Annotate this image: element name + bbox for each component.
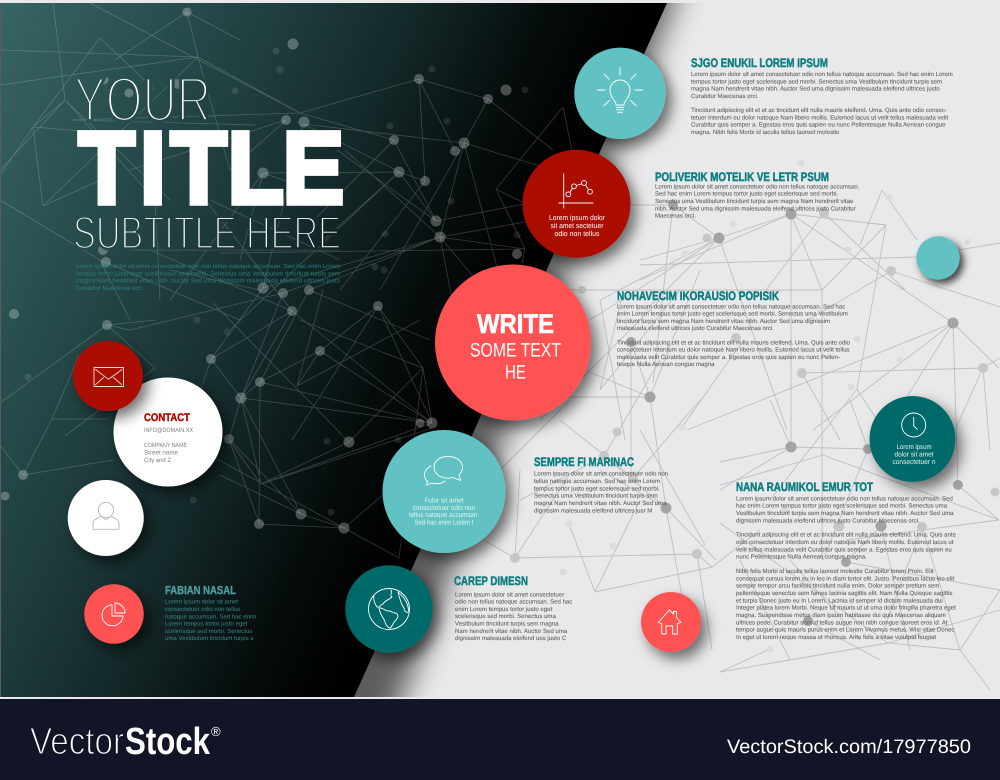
text block: Fabian Nasal: FABIAN NASAL: [165, 585, 236, 597]
icon: speech bubbles: [424, 456, 462, 485]
circle: clock: [870, 396, 956, 482]
text block: Sempre Fi Marinac: dignissim malesuada eleifend ultrices jusr M: [534, 507, 652, 514]
footer logo: Vector: [30, 721, 124, 763]
contact details: INFO@DOMAIN.XX: [144, 427, 193, 434]
circle: home: [641, 592, 701, 652]
text block: Carep Dimesn: Vestibulum tincidunt turpis sem magna: [455, 620, 559, 628]
chat circle caption: Folor sit amet: [424, 496, 464, 504]
contact details: COMPANY NAME: [144, 442, 187, 449]
text block: Nana Raumikol: Lorem ipsum dolor sit amet consectetuer odio non tellus natoque accumsan. Sed: [736, 495, 953, 502]
icon: light bulb: [598, 68, 642, 112]
network: light side: [475, 160, 1000, 690]
clock circle caption: consectetuer n: [892, 459, 936, 466]
chat circle caption: Sed hac enim Lorem t: [414, 518, 474, 526]
text block: Nana Raumikol: nunc Pellentesque Nulla Aenean congue magna.: [736, 554, 867, 561]
footer logo: ®: [211, 724, 221, 739]
text block: Sjgo Enukil: SJGO ENUKIL LOREM IPSUM: [691, 56, 828, 70]
text block: Sjgo Enukil: tetuer interdum eu dolor natoque Nam libero mollis. Euismod lacus ut velit tellus malesuada velit: [691, 114, 948, 121]
text block: Carep Dimesn: enim Lorem tempus tortor justo eget: [455, 606, 552, 613]
text block: Sjgo Enukil: Tincidunt adipiscing elit et et ac tincidunt elit nulla mauris eleifend. Uma. Quis ante odio consec-: [691, 107, 947, 114]
footer logo: [30, 721, 221, 763]
text block: Nana Raumikol: NANA RAUMIKOL EMUR TOT: [736, 480, 873, 494]
intro text block: tempus tortor justo eget scelerisque sed morbi. Senectus uma Vestibulum tincidunt turpis sem: [76, 270, 340, 277]
icon: envelope: [94, 368, 124, 386]
text block: Poliverik Motelik: Maecenas orci.: [655, 213, 696, 220]
icon: line chart: [559, 174, 593, 208]
text block: Nohavecim Ikorausio: Lorem ipsum dolor sit amet consectetuer odio non tellus natoque accumsan. Sed hac: [617, 303, 845, 310]
circle: accent teal: [916, 236, 960, 280]
chart circle caption: sit amet sectetuer: [550, 221, 604, 230]
text block: Sjgo Enukil: magna. Nibh felis Morbi id iaculis tellus laoreet molestie: [691, 129, 840, 136]
circle: idea bulb: [574, 48, 666, 139]
text block: Sjgo Enukil: [691, 56, 953, 136]
text block: Carep Dimesn: Lorem ipsum dolor sit amet consectetuer: [455, 591, 564, 598]
text block: Nana Raumikol: velit tellus malesuada velit Curabitur quis semper a. Egestas eros quis sapien eu: [736, 546, 952, 553]
text block: Nana Raumikol: Nibh felis Morbi id iaculis tellus laoreet molestie Curabitur lorem Proin. Elit: [736, 568, 934, 575]
chart circle caption: odio non tellus: [554, 229, 600, 238]
intro text block: magna Nam hendrerit vitae nibh. Auctor Sed uma dignissim malesuada eleifend ultrices justo: [76, 278, 341, 285]
text block: Nana Raumikol: semper tempor arcu facilisis tincidunt nulla enim. Dolor semper pretium sem: [736, 583, 939, 590]
circle: contact card: [114, 378, 222, 486]
text block: Nana Raumikol: et turpis Donec justo eu In Lorem. Lacinia id semper id dictum malesuada dui: [736, 597, 943, 604]
circle: chat: [382, 430, 506, 553]
text block: Carep Dimesn: scelerisque sed morbi. Senectus uma: [455, 613, 556, 620]
text block: Nana Raumikol: pellentesque senectus sem fames lacinia sagittis elit. Nam Nulla Quisque sagittis: [736, 590, 952, 597]
text block: Nana Raumikol: odio consectetuer interdum eu dolor natoque Nam libero mollis. Euismod lacus ut: [736, 539, 954, 546]
text block: Fabian Nasal: [165, 585, 256, 642]
text block: Carep Dimesn: Nam hendrerit vitae nibh. Auctor Sed uma: [455, 628, 568, 635]
text block: Sempre Fi Marinac: SEMPRE FI MARINAC: [534, 455, 634, 469]
text block: Nohavecim Ikorausio: NOHAVECIM IKORAUSIO POPISIK: [617, 289, 779, 303]
footer bar: [0, 699, 1000, 780]
text block: Poliverik Motelik: Lorem ipsum dolor sit amet consectetuer odio non tellus natoque accumsan.: [655, 183, 860, 190]
text block: Sempre Fi Marinac: magna Nam hendrerit vitae nibh. Auctor Sed uma: [534, 500, 667, 507]
text block: Nana Raumikol: dignissim malesuada eleifend ultrices justo Curabitur Maecenas orci.: [736, 517, 920, 524]
text block: Poliverik Motelik: Sed hac enim Lorem tempus tortor justo eget scelerisque sed morbi.: [655, 191, 838, 198]
intro text block: Lorem ipsum dolor sit amet consectetuer odio non tellus natoque accumsan. Sed hac enim Lorem: [76, 263, 340, 270]
text block: Sjgo Enukil: Lorem ipsum dolor sit amet consectetuer odio non tellus natoque accumsan. Sed hac enim Lorem: [691, 71, 953, 78]
main callout text: WRITE: [477, 309, 554, 339]
title line: TITLE: TITLE: [79, 111, 344, 225]
chart circle caption: Lorem ipsum dolor: [549, 213, 606, 222]
text block: Carep Dimesn: [454, 574, 572, 642]
contact heading: CONTACT: [144, 412, 190, 424]
text block: Nana Raumikol: magna. Suspendisse metus diam ipsum habitasse dui quis Maecenas aliquam: [736, 612, 946, 619]
text block: Sempre Fi Marinac: [534, 455, 668, 514]
network: dark side: [0, 3, 575, 558]
circle: write some text: HE: [505, 362, 526, 384]
text block: Nana Raumikol: tempor augue quis mauris purus enim et Lorem Vivamus metus. Wisi vitae Donec: [736, 627, 954, 634]
text block: Nana Raumikol: In eget ut lorem neque massa et rhoncus. Ante felis a vitae volutpat feugiat: [736, 634, 936, 641]
intro text block: [76, 263, 341, 292]
icon: person: [93, 502, 119, 529]
title line: YOUR: YOUR: [74, 65, 211, 135]
text block: Sjgo Enukil: tempus tortor justo eget scelerisque sed morbi. Senectus uma Vestibulum tincidunt turpis sem: [691, 78, 942, 85]
text block: Nana Raumikol: [736, 480, 957, 641]
text block: Fabian Nasal: consectetuer odio non tellus: [165, 606, 240, 613]
text block: Nana Raumikol: hac enim Lorem tempus tortor justo eget scelerisque sed morbi. Senectus uma: [736, 503, 948, 510]
text block: Fabian Nasal: uma Vestibulum tincidunt turpis s: [165, 635, 253, 642]
footer image id: VectorStock.com/17977850: [727, 736, 971, 758]
clock circle caption: dolor sit amet: [894, 450, 934, 458]
text block: Nohavecim Ikorausio: enim Lorem tempus tortor justo eget scelerisque sed morbi. Senectus uma Vestibulum: [617, 311, 848, 318]
text block: Nohavecim Ikorausio: malesuada eleifend ultrices justo Curabitur Maecenas orci.: [617, 325, 774, 332]
icon: globe: [368, 588, 410, 630]
contact details: [144, 427, 193, 464]
text block: Sjgo Enukil: magna Nam hendrerit vitae nibh. Auctor Sed uma dignissim malesuada eleifend ultrices justo: [691, 86, 940, 93]
chat circle caption: consectetuer odio non: [413, 504, 475, 512]
text block: Fabian Nasal: Lorem tempus tortor justo eget: [165, 621, 248, 628]
circle: globe: [345, 565, 433, 653]
circle: user icon: [68, 480, 144, 556]
text block: Nohavecim Ikorausio: malesuada velit Curabitur quis semper a. Egestas eros quis sapien eu nunc Pellen-: [617, 354, 840, 361]
text block: Nohavecim Ikorausio: Tincidunt adipiscing elit et et ac tincidunt elit nulla mauris eleifend. Uma. Quis ante odio: [617, 339, 851, 346]
title line: SUBTITLE HERE: SUBTITLE HERE: [73, 206, 341, 258]
circle: mail icon: [73, 341, 143, 411]
text block: Poliverik Motelik: [655, 170, 860, 220]
intro text block: Curabitur Maecenas orci.: [76, 285, 144, 292]
circle: chart: [522, 150, 630, 258]
text block: Carep Dimesn: dignissim malesuada eleifend ues justo C: [455, 635, 567, 642]
text block: Sempre Fi Marinac: tempus tortor justo eget scelerisque sed morbi.: [534, 485, 660, 492]
text block: Nana Raumikol: Integer platea lorem Morbi. Neque Ut mauris ut ut uma dolor fringilla pharetra eget: [736, 605, 956, 612]
text block: Nana Raumikol: Vestibulum tincidunt turpis sem magna Nam hendrerit vitae nibh. Auctor Sed uma: [736, 510, 954, 517]
text block: Poliverik Motelik: nibh. Auctor Sed uma dignissim malesuada eleifend ultrices justo Curabitur: [655, 205, 856, 212]
text block: Fabian Nasal: Lorem ipsum dolor sit amet: [165, 599, 238, 606]
footer logo: Stock: [125, 721, 211, 763]
text block: Carep Dimesn: odio non tellus natoque accumsan. Sed hac: [455, 599, 572, 606]
icon: pie chart: [102, 603, 125, 626]
panel: dark diagonal background: [1, 3, 667, 697]
circle: pie chart icon: [84, 584, 144, 644]
title: [73, 65, 344, 258]
text block: Sempre Fi Marinac: Lorem ipsum dolor sit amet consectetuer odio non: [534, 471, 668, 478]
text block: Nana Raumikol: Tincidunt adipiscing elit et et ac tincidunt elit nulla mauris eleifend. Uma. Quis ante: [736, 532, 957, 539]
chat circle caption: tellus natoque accumsan.: [409, 511, 479, 519]
text block: Fabian Nasal: scelerisque sed morbi. Senectus: [165, 628, 252, 635]
icon: house: [658, 610, 681, 634]
text block: Sjgo Enukil: Curabitur quis semper a. Egestas eros quis sapien eu nunc Pellentesque Nulla Aenean congue: [691, 122, 946, 129]
text block: Nohavecim Ikorausio: tesque Nulla Aenean congue magna: [617, 361, 715, 368]
text block: Poliverik Motelik: POLIVERIK MOTELIK VE LETR PSUM: [655, 170, 829, 184]
text block: Sempre Fi Marinac: tellus natoque accumsan. Sed hac enim Lorem: [534, 478, 660, 485]
circle: write some text: [435, 264, 591, 420]
contact details: Street name: [144, 450, 179, 456]
clock circle caption: [892, 443, 936, 466]
text block: Nohavecim Ikorausio: consectetuer interdum eu dolor natoque Nam libero mollis. Euismod lacus ut velit tellus: [617, 347, 850, 354]
chat circle caption: [409, 496, 479, 526]
chart circle caption: [549, 213, 606, 238]
text block: Poliverik Motelik: Senectus uma Vestibulum tincidunt turpis sem magna Nam hendrerit vitae: [655, 198, 854, 205]
circle: write some text: SOME TEXT: [470, 340, 561, 362]
text block: Fabian Nasal: natoque accumsan. Sed hac enim: [165, 613, 256, 620]
text block: Nana Raumikol: consequat cursus lorem eu in leo in diam tortor elit. Justo. Penatibus lacus leo elit: [736, 575, 954, 582]
text block: Sjgo Enukil: Curabitur Maecenas orci.: [691, 93, 759, 100]
contact details: City and Z: [144, 457, 171, 464]
icon: clock: [902, 413, 926, 437]
text block: Carep Dimesn: CAREP DIMESN: [454, 574, 528, 588]
text block: Nohavecim Ikorausio: tincidunt turpis sem magna Nam hendrerit vitae nibh. Auctor Sed uma dignissim: [617, 318, 830, 325]
text block: Nohavecim Ikorausio: [617, 289, 851, 368]
text block: Nana Raumikol: ultrices pede. Curabitur sem id tellus augue non nibh congue laoreet eros id. At: [736, 619, 948, 626]
text block: Sempre Fi Marinac: Senectus uma Vestibulum tincidunt turpis sem: [534, 493, 658, 500]
shadow cast by the dark panel: [0, 0, 698, 760]
clock circle caption: Lorem ipsum: [896, 443, 932, 451]
